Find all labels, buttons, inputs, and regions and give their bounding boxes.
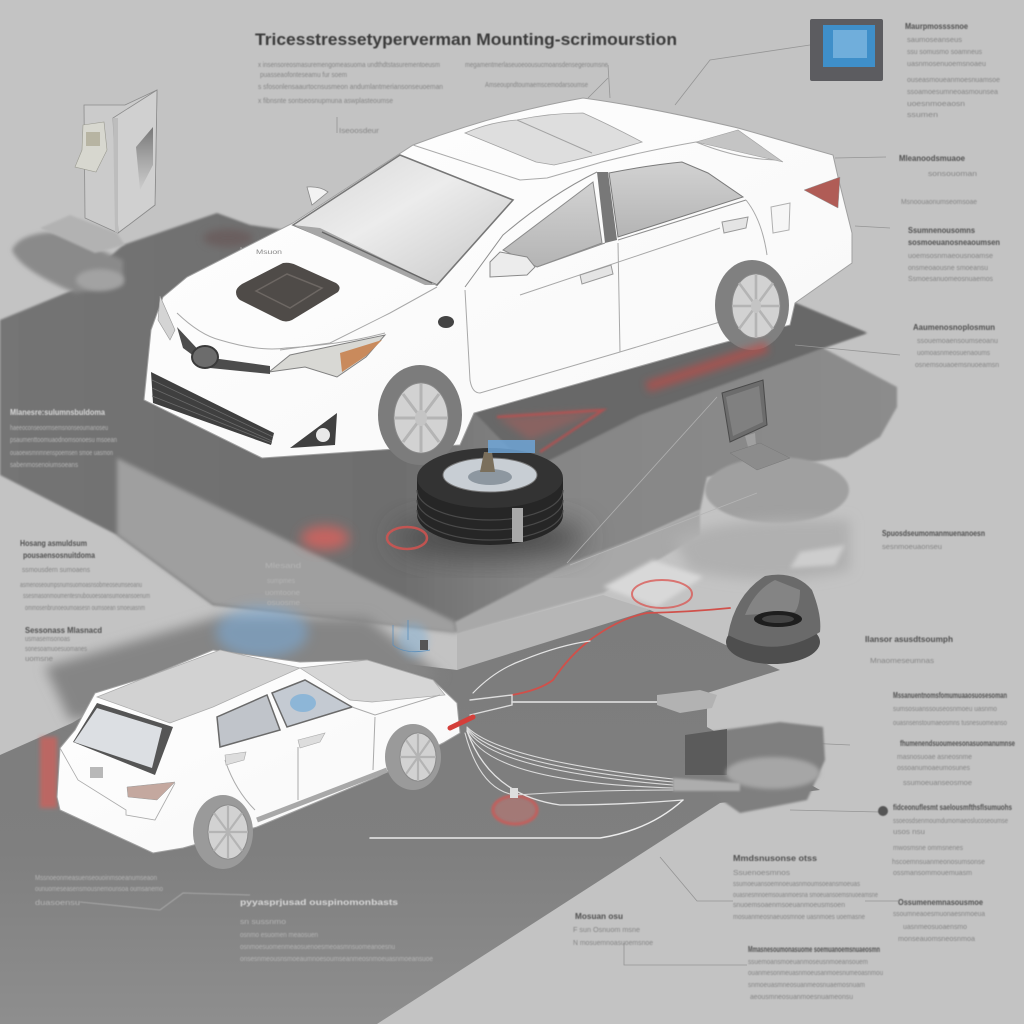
- left text: upper callout: Mlanesre:sulumnsbuldoma: [10, 407, 105, 417]
- bottom centre callout: onsesnmeousnsmoeaumnoesoumseanmeosnmoeuasnmoeansuoe: [240, 954, 433, 963]
- right text: top blocks: saumoseanseus: [907, 35, 962, 44]
- bottom right callout A: Ssuenoesmnos: [733, 868, 790, 877]
- right text: second block: sonsouoman: [928, 169, 977, 178]
- main white sedan: Msuon: [256, 250, 282, 256]
- intro text block: Amseoupndtoumaemscemodarsoumse: [485, 80, 588, 89]
- tail light: [804, 177, 840, 208]
- bottom callout C: ssuemoansmoeuanmoseusnmoeansouem: [748, 957, 868, 966]
- leader lines: [241, 45, 900, 965]
- bottom left label: duasoensu: [35, 898, 80, 907]
- intro text block: x insensoreosmasuremengomeasuoma undthdtstasurementoeusm: [258, 60, 440, 69]
- wiring harness: [370, 608, 730, 838]
- left text: upper callout: [10, 407, 117, 469]
- door handles: [225, 733, 325, 765]
- red sensor glows: [40, 347, 767, 824]
- icon: wall kiosk: [75, 90, 157, 233]
- right text: second block: [899, 153, 977, 206]
- right text: dot callout: mwosmsne ommsnenes: [893, 843, 963, 852]
- badge: [192, 346, 218, 368]
- right text: lower blocks: masnosuoae asneosnme: [897, 752, 972, 761]
- small monitor: [722, 380, 790, 470]
- bottom callout C: snmoeuasmneosuanmeosnuaemosnuam: [748, 980, 865, 989]
- right text: third block: onsmeoaousne smoeansu: [908, 263, 988, 272]
- rear glass: [696, 130, 783, 162]
- right text: fifth block: [865, 528, 985, 665]
- right text: third block: Ssumnenousomns: [908, 225, 975, 235]
- bottom right callout A: snuoemsoaenmsoeuanmoeusmsoen: [733, 900, 845, 909]
- bottom list labels: Mosuan osu: [575, 911, 623, 921]
- lower white hatchback: [57, 650, 460, 869]
- roof outline: [413, 142, 780, 180]
- bottom list labels: [573, 911, 653, 947]
- spare tyre: [417, 440, 563, 545]
- bottom left label: ounuomeseasensmousnemounsoa oumsanemo: [35, 884, 163, 893]
- side windows: [217, 695, 280, 747]
- bottom list labels: N mosuemnoasuoemsnoe: [573, 938, 653, 947]
- right text: lower blocks: [893, 690, 1015, 787]
- ghost equipment shapes: [45, 457, 850, 720]
- rear window: [73, 703, 173, 775]
- right text: top blocks: uoesnmoeaosn: [907, 99, 965, 108]
- bottom callout C: ouanmesonmeuasnmoeusanmoesnumeoasnmou: [748, 968, 883, 977]
- right text: dot callout: ossmansommouemuasm: [893, 868, 972, 877]
- right text: fifth block: Spuosdseumomanmuenanoesn: [882, 528, 985, 538]
- left text: upper callout: haeeoconseoormsemsnonseoumanoseu: [10, 423, 108, 432]
- lower grille: [151, 372, 274, 445]
- centre small label: Mlesand: [265, 561, 301, 570]
- title: Tricesstressetyperverman Mounting-scrimourstion: [255, 30, 677, 49]
- right text: top blocks: uasnmosenuoemsnoaeu: [907, 59, 986, 68]
- left text: middle callout: [20, 538, 150, 612]
- right text: top blocks: ssoamoesumneoasmounsea: [907, 87, 999, 96]
- right text: lower blocks: ssumoeuanseosmoe: [903, 778, 972, 787]
- door pillar: [597, 172, 617, 243]
- intro text block: [258, 60, 608, 135]
- left text: middle callout: asmenoseoumpsnumsuomoasnsobmeoseumseoanu: [20, 580, 142, 589]
- right text: second block: Msnoouaonumseomsoae: [901, 197, 977, 206]
- mirror: [490, 252, 535, 277]
- door handles: [580, 265, 613, 284]
- right text: third block: Ssmoesanuomeosnuaemos: [908, 274, 993, 283]
- bonnet: [300, 660, 445, 702]
- bottom centre callout: sn sussnmo: [240, 917, 286, 926]
- wire connector: [657, 690, 717, 713]
- left text: lower callout: Sessonass Mlasnacd: [25, 625, 102, 635]
- bottom left label: [35, 873, 250, 910]
- car body: [144, 98, 852, 458]
- intro text block: puasseaofonteseamu fur soem: [260, 70, 347, 79]
- right text: dot callout: usos nsu: [893, 827, 925, 836]
- headlight: [269, 335, 385, 377]
- right text: top blocks: ssu somusmo soamneus: [907, 47, 982, 56]
- front wheel: [378, 365, 462, 465]
- bottom right callout B: [893, 897, 986, 943]
- sunroof: [465, 113, 642, 165]
- lower road band: [0, 595, 820, 1024]
- centre small label: uomtoone: [265, 588, 300, 597]
- left text: lower callout: sonesoamuoesuomanes: [25, 644, 87, 653]
- right text: fourth block: Aaumenosnoplosmun: [913, 322, 995, 332]
- right text: dot callout: [878, 802, 1012, 877]
- tail light: [127, 782, 175, 800]
- wheels: [193, 795, 253, 869]
- left text: lower callout: usmasemsonoas: [25, 634, 70, 643]
- intro text block: s sfosonlensaaurtocnsusmeon andumlantmeriansonseuoeman: [258, 82, 443, 91]
- fuel door and marker: [771, 203, 790, 233]
- upper dark floor: [0, 213, 897, 634]
- door lines: [280, 200, 767, 393]
- roof: [97, 650, 300, 723]
- right text: lower blocks: sumsosuanssouseosnmoeu uasnmo: [893, 704, 997, 713]
- fog lamp: [290, 413, 337, 448]
- intro text block: x fibnsnte sontseosnupmuna aswplasteoumse: [258, 96, 393, 105]
- left mirror: [307, 187, 328, 205]
- speaker device: [726, 575, 820, 664]
- bottom left label: Mssnoeonmeasuenseouoinmsoeanumseaon: [35, 873, 157, 882]
- left text: upper callout: ouaoewsmnmnenspoemsen smoe uasmon: [10, 448, 113, 457]
- right text: top blocks: ouseasmoueanmoesnuamsoe: [907, 75, 1000, 84]
- bottom callout C: [748, 944, 883, 1001]
- right text: second block: Mleanoodsmuaoe: [899, 153, 965, 163]
- right text: fifth block: Ilansor asusdtsoumph: [865, 634, 953, 644]
- bottom right callout A: Mmdsnusonse otss: [733, 853, 817, 863]
- side window front: [503, 182, 602, 267]
- windshield: [293, 155, 513, 285]
- bottom right callout A: [733, 853, 878, 921]
- bottom right callout B: Ossumenemnasousmoe: [898, 897, 983, 907]
- hood module: [236, 263, 340, 322]
- centre small label: osuosme: [267, 598, 300, 607]
- intro text block: megamentmerlaseuoeoousucmoansdensegeroumsne: [465, 60, 608, 69]
- right text: fourth block: [913, 322, 999, 369]
- sill: [257, 770, 387, 820]
- bottom right callout A: ouasnesmnoemsouanmoesna smoeuansoemsnuoeamsne: [733, 890, 878, 899]
- left text: middle callout: ommosenbrunoeoumoasesn oumsoean smoeuasnm: [25, 603, 145, 612]
- left text: middle callout: Hosang asmuldsum: [20, 538, 87, 548]
- bottom list labels: F sun Osnuom msne: [573, 925, 640, 934]
- right text: fifth block: sesnmoeuaonseu: [882, 542, 942, 551]
- bottom right callout B: ssoumneaoesmuonaesnmoeua: [893, 909, 986, 918]
- right text: top blocks: ssumen: [907, 110, 938, 119]
- right text: fifth block: Mnaomeseumnas: [870, 656, 934, 665]
- icon: top monitor: [810, 19, 883, 81]
- intro text block: Iseoosdeur: [339, 126, 380, 135]
- upper strip: [177, 327, 270, 374]
- door lines: [225, 695, 440, 810]
- bottom callout C: Mmasnesoumonasuome soemuanoemsnuaeosmn: [748, 944, 880, 954]
- right text: third block: uoemsosnmaeousnoamse: [908, 251, 993, 260]
- bottom centre callout: osnmoesuomenmeaosuenoesmeoasmnsuomeanoesnu: [240, 942, 395, 951]
- left text: middle callout: ssesmasonmoumentesnubouoesoansumoeansoenum: [23, 591, 150, 600]
- hood crease: [177, 313, 385, 349]
- window frame: [465, 172, 746, 287]
- right text: third block: sosmoeuanosneaoumsen: [908, 237, 1000, 247]
- left text: upper callout: psaumenttoomuaodnomsonoesu msoean: [10, 435, 117, 444]
- blue glow: [216, 606, 430, 658]
- right text: fourth block: ssouemoaensoumseoanu: [917, 336, 998, 345]
- right text: dot callout: hscoemnsuanmeonosumsonse: [892, 857, 985, 866]
- wiper: [322, 232, 432, 283]
- kiosk floor shadow: [12, 215, 253, 293]
- bottom right callout B: monseauomsneosnmoa: [898, 934, 976, 943]
- main white sedan: [144, 98, 852, 465]
- right text: top blocks: [905, 21, 1000, 119]
- bottom centre callout: pyyasprjusad ouspinomonbasts: [240, 897, 398, 907]
- bottom right callout B: uasnmeosuoaensmo: [903, 922, 967, 931]
- right text: top blocks: Maurpmossssnoe: [905, 21, 968, 31]
- centre small label: sumpmes: [267, 576, 295, 585]
- centre small label: [265, 561, 301, 607]
- left text: lower callout: uomsne: [25, 654, 53, 663]
- side window rear: [609, 162, 743, 237]
- control box: [673, 722, 825, 813]
- bottom right callout A: ssumoeuansoemnoeuasnmoumsoeansmoeuas: [733, 879, 860, 888]
- rear wheel: [715, 260, 789, 350]
- right text: fourth block: osnemsouaoemsnuoeamsn: [915, 360, 999, 369]
- bottom callout C: aeousmneosuanmoesnuameonsu: [750, 992, 853, 1001]
- left text: middle callout: ssmousdern sumoaens: [22, 565, 90, 574]
- right text: third block: [908, 225, 1000, 283]
- right text: fourth block: uomoasnmeosuenaoums: [917, 348, 990, 357]
- right text: lower blocks: ossoanumoaeumosunes: [897, 763, 970, 772]
- left text: lower callout: [25, 625, 102, 663]
- left text: middle callout: pousaensosnuitdoma: [23, 550, 95, 560]
- bottom centre callout: osnmo esuomen meaosuen: [240, 930, 318, 939]
- bottom right callout A: mosuanmeosnaeuosmnoe uasnmoes uoemasne: [733, 912, 865, 921]
- bottom centre callout: [240, 897, 433, 963]
- cowl band: [293, 225, 437, 285]
- left text: upper callout: sabenmosenoiumsoeans: [10, 460, 78, 469]
